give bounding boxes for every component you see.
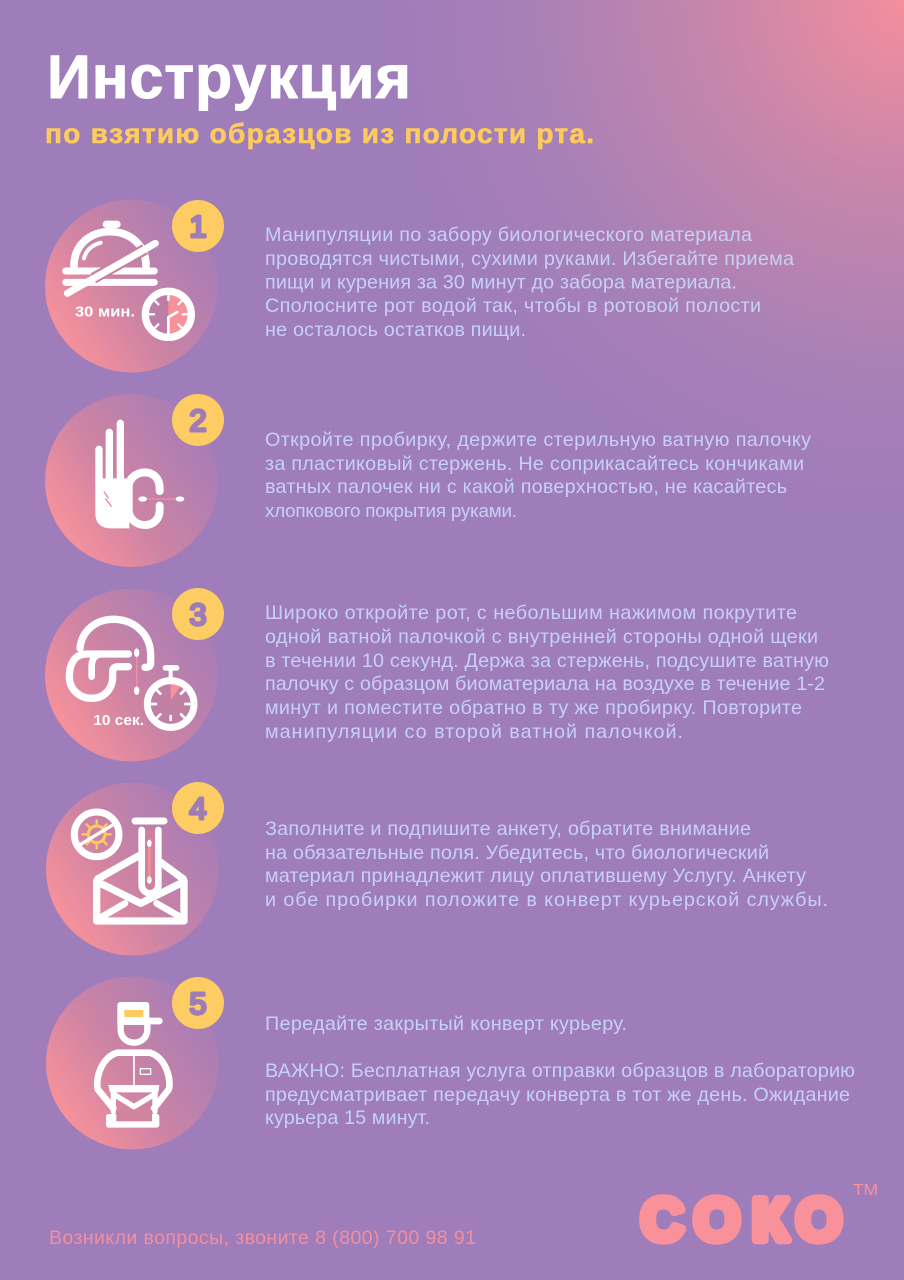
step 4 text [265,818,828,911]
step 5 badge: 5 [189,986,207,1021]
step 3 badge [172,588,224,640]
step 2 text: хлопкового покрытия руками. [265,500,517,521]
step 1 text [265,224,794,341]
logo wordmark: СОКО [641,1187,842,1253]
title: Инструкция [47,43,411,111]
icon: mouth with swab and stopwatch: 10 сек. [93,712,144,729]
step 4 circle [46,782,219,956]
step 3 text [265,602,829,743]
step 3 circle [45,588,218,762]
step 3 text: манипуляции со второй ватной палочкой. [265,721,683,743]
step 3 text: палочку с образцом биоматериала на воздухе в течение 1-2 [265,673,825,695]
step 3 text: в течении 10 секунд. Держа за стержень, подсушите ватную [265,650,829,672]
step 1 badge [172,200,224,252]
step 1 badge: 1 [189,209,207,244]
step 1 text: Сполосните рот водой так, чтобы в ротовой полости [265,295,761,317]
step 5 text: ВАЖНО: Бесплатная услуга отправки образцов в лабораторию [265,1060,855,1082]
icon: envelope with test tube [74,812,184,921]
step 1 text: Манипуляции по забору биологического материала [265,224,752,246]
logo [641,1182,878,1253]
step 5 text: предусматривает передачу конверта в тот же день. Ожидание [265,1084,850,1106]
step 1 text: не осталось остатков пищи. [265,319,526,341]
step 5 circle [46,976,219,1150]
step 3 badge: 3 [189,597,207,632]
icon: covered dish with clock [66,221,191,337]
step 4 text: и обе пробирки положите в конверт курьерской службы. [265,889,828,911]
step 5 panel [46,976,224,1150]
step 2 text: за пластиковый стержень. Не соприкасайтесь кончиками [265,453,804,475]
step 2 circle [45,394,218,567]
icon: courier with envelope [97,1002,169,1128]
step 1 panel [45,200,224,372]
step 1 text: проводятся чистыми, сухими руками. Избегайте приема [265,248,794,270]
step 4 text: на обязательные поля. Убедитесь, что биологический [265,842,769,864]
subtitle: по взятию образцов из полости рта. [45,118,594,149]
step 3 text: минут и поместите обратно в ту же пробирку. Повторите [265,697,802,719]
footer contact line: Возникли вопросы, звоните 8 (800) 700 98 91 [49,1227,476,1249]
step 5 text [265,1013,855,1129]
step 2 panel [45,394,224,567]
step 5 text: курьера 15 минут. [265,1107,430,1129]
step 2 text [265,429,811,521]
step 3 panel [45,588,224,762]
step 2 badge [172,394,224,446]
step 4 badge: 4 [189,791,207,826]
icon: mouth with swab and stopwatch [69,619,194,729]
trademark: TM [853,1182,878,1199]
step 5 badge [172,977,224,1029]
step 4 text: материал принадлежит лицу оплатившему Услугу. Анкету [265,865,806,887]
step 4 panel [46,782,224,956]
step 4 text: Заполните и подпишите анкету, обратите внимание [265,818,751,840]
step 3 text: Широко откройте рот, с небольшим нажимом покрутите [265,602,797,624]
step 2 text: ватных палочек ни с какой поверхностью, не касайтесь [265,476,787,498]
icon: hand holding swab [95,423,184,528]
step 2 badge: 2 [189,403,207,438]
step 2 text: Откройте пробирку, держите стерильную ватную палочку [265,429,811,451]
icon: covered dish with clock: 30 мин. [75,304,135,321]
step 1 text: пищи и курения за 30 минут до забора материала. [265,272,737,294]
step 4 badge [172,782,224,834]
step 1 circle [45,200,218,372]
step 5 text: Передайте закрытый конверт курьеру. [265,1013,627,1035]
step 3 text: одной ватной палочкой с внутренней стороны одной щеки [265,626,818,648]
